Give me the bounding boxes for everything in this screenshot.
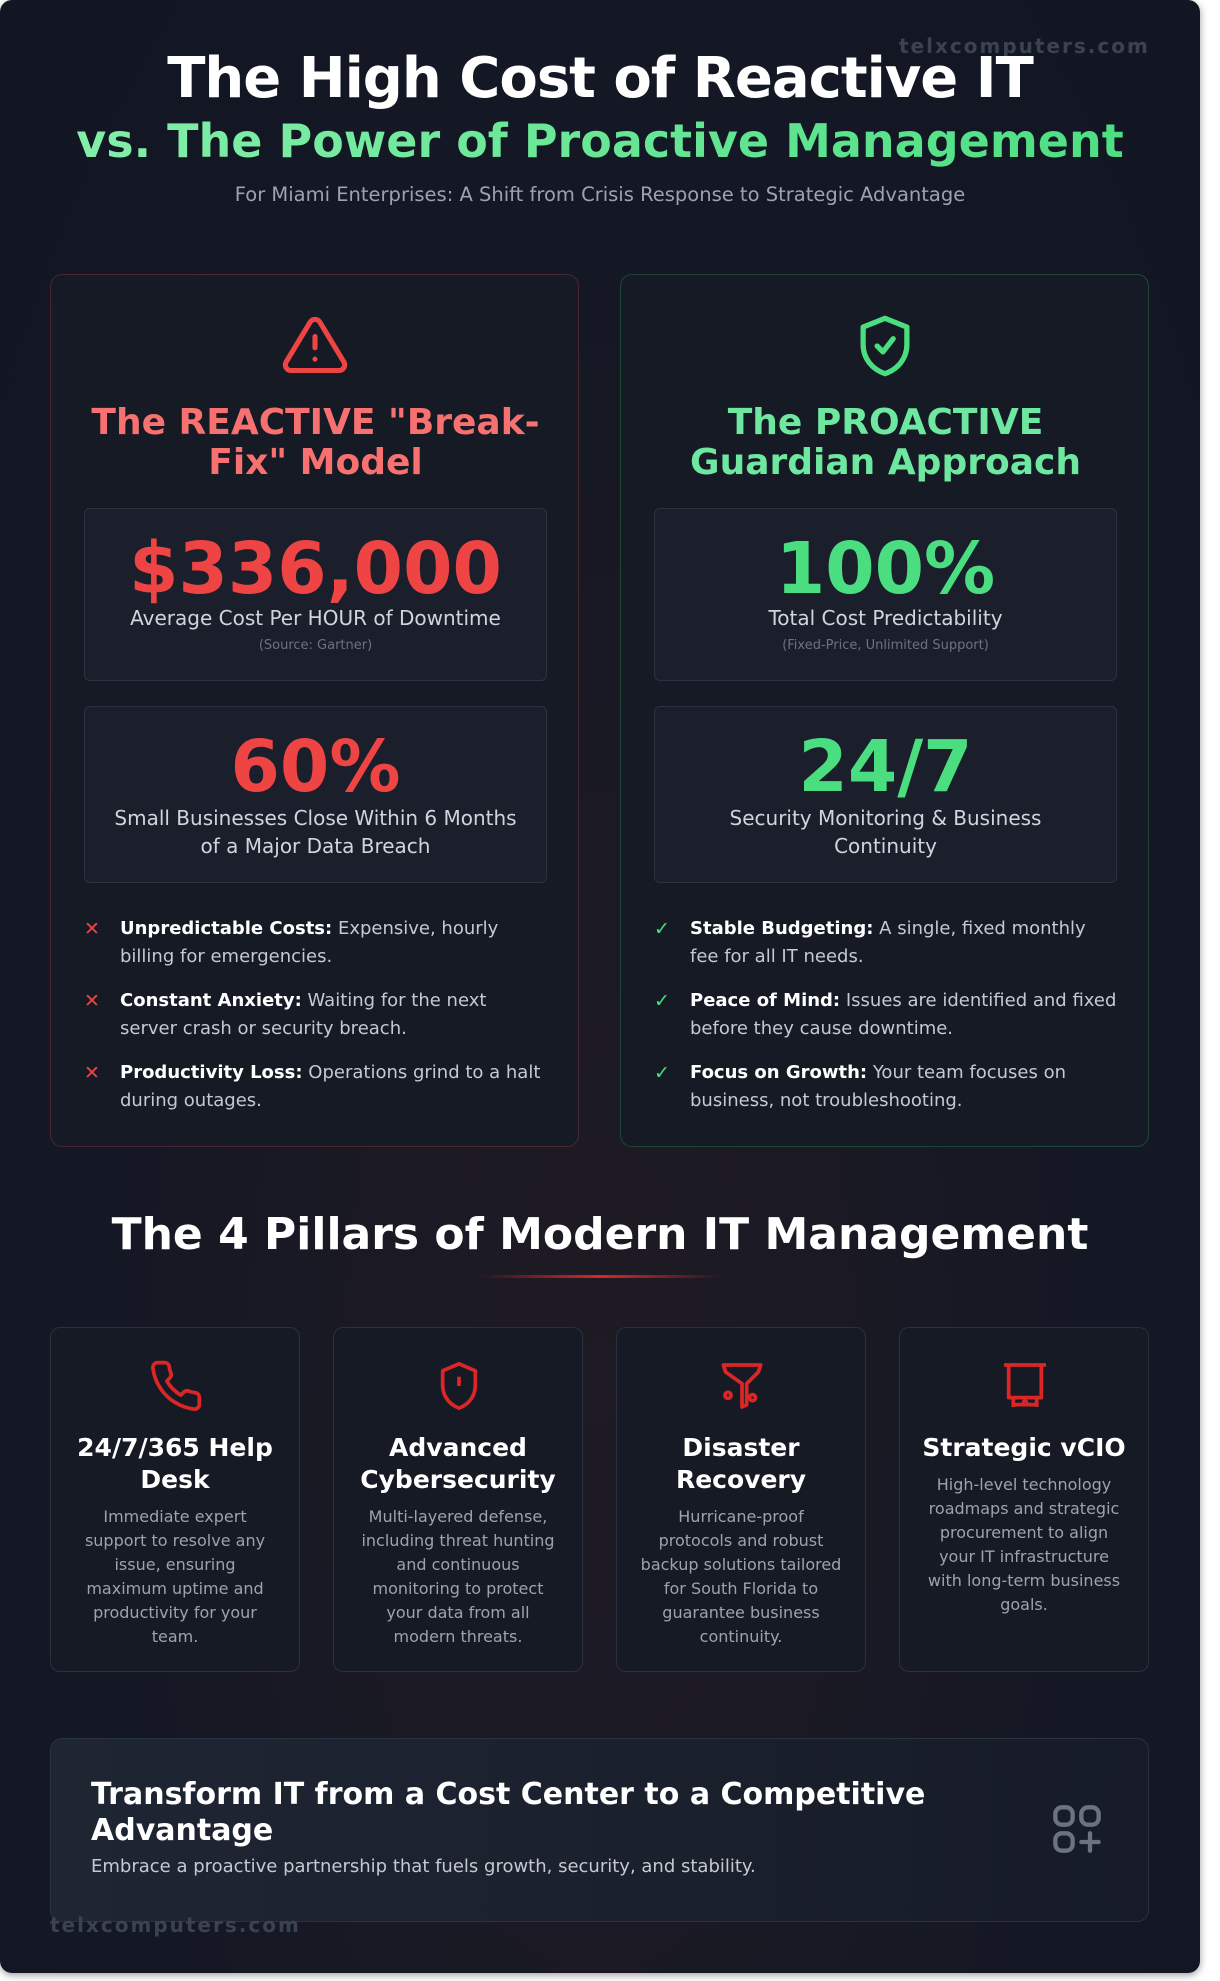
cta text: Embrace a proactive partnership that fuels growth, security, and stability. xyxy=(91,1856,756,1877)
bullet list: Focus on Growth: Your team focuses on xyxy=(690,1062,1066,1083)
pillar: help desk: issue, ensuring xyxy=(114,1555,236,1574)
pillar: disaster recovery: Disaster xyxy=(682,1433,800,1462)
bullet list: ✕ xyxy=(84,1062,100,1084)
icon: phone xyxy=(151,1360,202,1411)
pillar: help desk: Desk xyxy=(140,1465,210,1494)
heading: The REACTIVE "Break- xyxy=(91,402,540,443)
pillar: disaster recovery xyxy=(616,1327,866,1672)
icon: shield check xyxy=(860,316,910,376)
pillar: vCIO: with long-term business xyxy=(928,1571,1120,1590)
stat: 100%: 100% xyxy=(776,527,995,610)
cta title xyxy=(91,1777,925,1848)
stat: cost xyxy=(84,508,547,681)
stat: 24/7: Security Monitoring & Business xyxy=(730,806,1041,830)
pillar: cybersecurity: and continuous xyxy=(396,1555,520,1574)
pillar: vCIO: goals. xyxy=(1000,1595,1048,1614)
bullet list: Productivity Loss: Operations grind to a halt xyxy=(120,1062,540,1083)
stat: 100%: (Fixed-Price, Unlimited Support) xyxy=(782,638,989,653)
stat: 24/7 xyxy=(654,706,1117,883)
pillar: disaster recovery: guarantee business xyxy=(662,1603,820,1622)
bullet list: ✕ xyxy=(84,918,100,940)
pillar: disaster recovery: for South Florida to xyxy=(664,1579,818,1598)
bullet list xyxy=(654,918,1116,1111)
stat: cost: Average Cost Per HOUR of Downtime xyxy=(130,606,501,630)
bullet list: ✓ xyxy=(654,1062,670,1084)
tagline: For Miami Enterprises: A Shift from Crisis Response to Strategic Advantage xyxy=(235,183,965,206)
pillar: help desk: Immediate expert xyxy=(103,1507,247,1526)
pillar: help desk: support to resolve any xyxy=(85,1531,265,1550)
heading xyxy=(91,402,540,483)
stat: 100%: Total Cost Predictability xyxy=(768,606,1003,630)
pillar: disaster recovery: backup solutions tailored xyxy=(641,1555,841,1574)
panel: reactive xyxy=(50,274,579,1147)
stat: 60% xyxy=(84,706,547,883)
section heading: The 4 Pillars of Modern IT Management xyxy=(112,1209,1088,1260)
pillar: cybersecurity: including threat hunting xyxy=(361,1531,555,1550)
pillar: cybersecurity: Advanced xyxy=(389,1433,527,1462)
stat: 60%: 60% xyxy=(231,725,400,808)
pillar: vCIO: High-level technology xyxy=(937,1475,1111,1494)
icon: shield xyxy=(440,1362,478,1410)
pillar: help desk: 24/7/365 Help xyxy=(77,1433,273,1462)
icon: board xyxy=(1004,1363,1046,1407)
bullet list: during outages. xyxy=(120,1090,262,1111)
pillar: vCIO: your IT infrastructure xyxy=(939,1547,1109,1566)
pillar: disaster recovery: Hurricane-proof xyxy=(678,1507,804,1526)
bullet list: ✓ xyxy=(654,990,670,1012)
bullet list: business, not troubleshooting. xyxy=(690,1090,963,1111)
pillar: cybersecurity: Cybersecurity xyxy=(360,1465,556,1494)
bullet list: ✕ xyxy=(84,990,100,1012)
stat: 60%: of a Major Data Breach xyxy=(200,834,430,858)
pillar: cybersecurity: modern threats. xyxy=(394,1627,522,1646)
title: The High Cost of Reactive IT xyxy=(167,46,1033,111)
icon: warning xyxy=(282,316,348,373)
bullet list: server crash or security breach. xyxy=(120,1018,407,1039)
bullet list: billing for emergencies. xyxy=(120,946,332,967)
subtitle green: vs. The Power of Proactive Management xyxy=(76,114,1124,168)
pillar: vCIO: roadmaps and strategic xyxy=(929,1499,1119,1518)
pillar: cybersecurity xyxy=(333,1327,583,1672)
pillar: help desk: productivity for your xyxy=(93,1603,257,1622)
heading: Fix" Model xyxy=(208,442,423,483)
bullet list: Unpredictable Costs: Expensive, hourly xyxy=(120,918,498,939)
stat: cost: (Source: Gartner) xyxy=(259,638,372,653)
stat: 24/7: Continuity xyxy=(834,834,937,858)
bullet list: ✓ xyxy=(654,918,670,940)
panel: proactive xyxy=(620,274,1149,1147)
cta title: Transform IT from a Cost Center to a Competitive xyxy=(91,1777,925,1812)
pillar: vCIO xyxy=(899,1327,1149,1672)
pillar: vCIO: procurement to align xyxy=(940,1523,1108,1542)
stat: cost: $336,000 xyxy=(129,527,502,610)
stat: 60%: Small Businesses Close Within 6 Months xyxy=(114,806,517,830)
heading: Guardian Approach xyxy=(690,442,1081,483)
pillar: help desk: team. xyxy=(152,1627,198,1646)
pillar: cybersecurity: monitoring to protect xyxy=(373,1579,543,1598)
pillar: help desk xyxy=(50,1327,300,1672)
bullet list: before they cause downtime. xyxy=(690,1018,953,1039)
pillar: cybersecurity: Multi-layered defense, xyxy=(369,1507,547,1526)
watermark top: telxcomputers.com xyxy=(899,34,1150,58)
pillar: help desk: maximum uptime and xyxy=(86,1579,264,1598)
icon: grid plus xyxy=(1053,1805,1101,1853)
bullet list: fee for all IT needs. xyxy=(690,946,864,967)
heading xyxy=(690,402,1081,483)
stat: 24/7: 24/7 xyxy=(798,725,973,808)
pillar: disaster recovery: continuity. xyxy=(700,1627,782,1646)
callout: CTA xyxy=(50,1738,1149,1922)
stat: 100% xyxy=(654,508,1117,681)
bullet list xyxy=(84,918,540,1111)
bullet list: Stable Budgeting: A single, fixed monthly xyxy=(690,918,1086,939)
pillar: disaster recovery: Recovery xyxy=(676,1465,806,1494)
watermark bottom: telxcomputers.com xyxy=(50,1913,301,1937)
icon: funnel xyxy=(721,1363,762,1409)
cta title: Advantage xyxy=(91,1813,273,1848)
heading: The PROACTIVE xyxy=(728,402,1043,443)
bullet list: Constant Anxiety: Waiting for the next xyxy=(120,990,486,1011)
pillar: cybersecurity: your data from all xyxy=(386,1603,530,1622)
bullet list: Peace of Mind: Issues are identified and fixed xyxy=(690,990,1116,1011)
pillar: disaster recovery: protocols and robust xyxy=(659,1531,823,1550)
pillar: vCIO: Strategic vCIO xyxy=(922,1433,1126,1462)
